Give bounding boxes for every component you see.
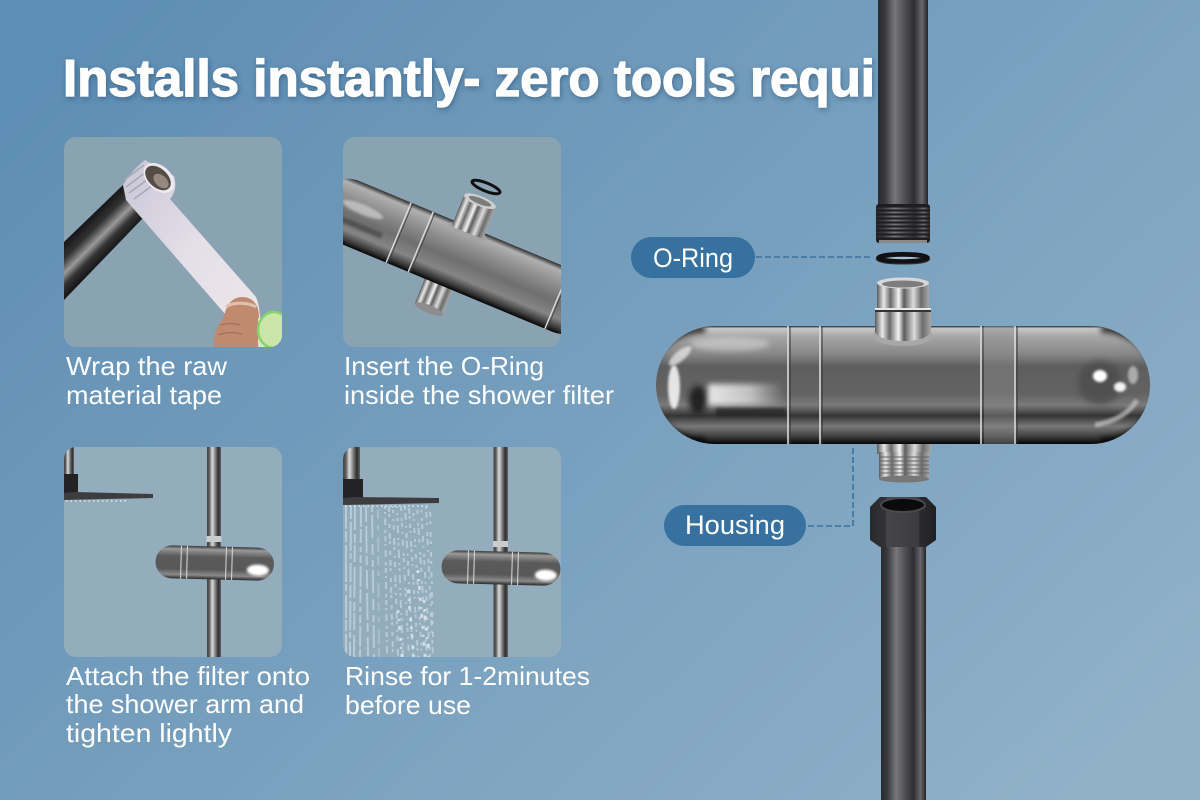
step 4 caption: before use: [345, 690, 471, 720]
step 4 image: [343, 447, 561, 657]
o-ring leader line: [756, 256, 872, 258]
step 3 caption: the shower arm and: [66, 689, 304, 719]
lower hex nut: [870, 497, 936, 547]
o-ring text: O-Ring: [653, 243, 733, 273]
step 1 caption: Wrap the raw: [66, 351, 227, 381]
filter capsule body: [646, 326, 1160, 444]
step 4 caption: Rinse for 1-2minutes: [345, 661, 590, 691]
housing leader line: [808, 445, 853, 526]
step 1 image: [64, 137, 290, 348]
title: Installs instantly- zero tools requi: [63, 50, 875, 108]
housing pill: [664, 505, 806, 546]
step 2 caption: Insert the O-Ring: [344, 351, 544, 381]
o-ring part: [876, 254, 930, 264]
o-ring pill: [631, 237, 755, 278]
panel: step 4 rinse: [343, 447, 590, 720]
panel: step 3 attach filter: [64, 447, 310, 748]
step 1 caption: material tape: [66, 380, 222, 410]
housing text: Housing: [685, 510, 785, 540]
lower shower pipe: [881, 547, 926, 800]
panel: step 1 wrap tape: [64, 137, 290, 410]
step 3 caption: Attach the filter onto: [66, 661, 310, 691]
step 2 image: [343, 137, 561, 347]
filter top fitting: [873, 278, 933, 346]
panel: step 2 insert o-ring: [343, 137, 614, 404]
step 3 image: [64, 447, 282, 657]
callout: o-ring: [631, 237, 872, 278]
callout: housing: [664, 445, 853, 546]
filter bottom fitting: [877, 440, 931, 482]
upper shower pipe with thread: [876, 0, 930, 243]
step 3 caption: tighten lightly: [66, 718, 232, 748]
step 2 caption: inside the shower filter: [344, 380, 614, 410]
